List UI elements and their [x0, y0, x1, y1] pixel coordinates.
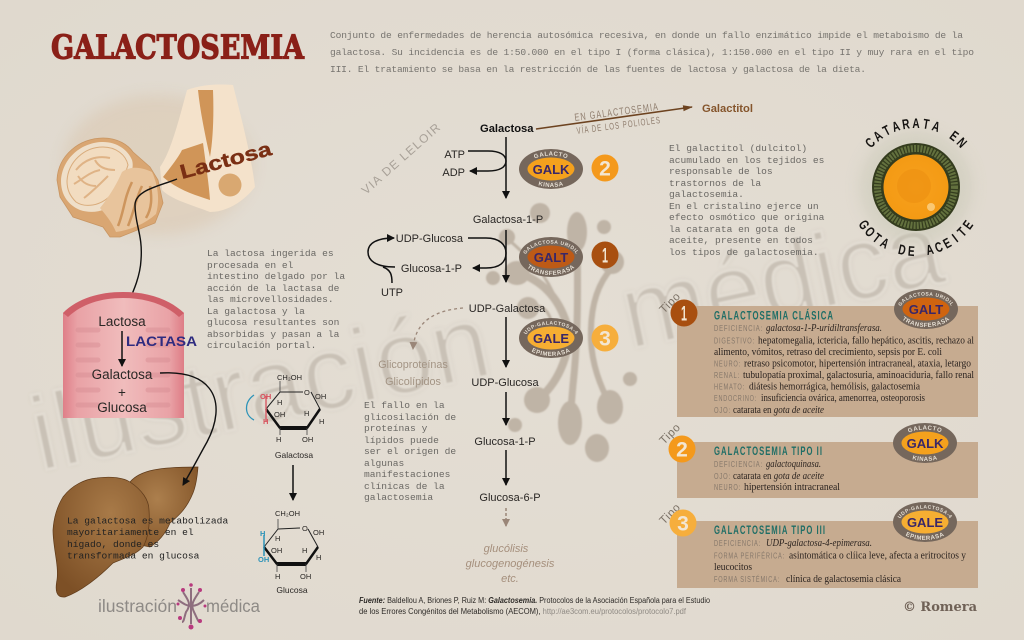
arrow: lactosa to galactosa — [121, 331, 123, 366]
badge: GALT panel: GALACTOSA URIDIL — [898, 292, 953, 306]
text: lactosa: procesada en el — [207, 260, 294, 271]
panel: galactosemia clásica: ENDOCRINO: — [714, 393, 757, 403]
panel: galactosemia clásica: tubulopatía proximal, galactosuria, aminoaciduria, fallo renal — [743, 370, 974, 381]
badge: GALT — [519, 237, 583, 277]
arrow: galactosa to liver — [160, 373, 216, 485]
intro text: Conjunto de enfermedades de herencia autosómica recesiva, en donde un fallo enzimático impide el metaboismo de la — [330, 30, 963, 41]
panel: galactosemia clásica: diátesis hemorrágica, hemólisis, galactosemia — [749, 382, 920, 392]
badge: GALK — [519, 149, 583, 189]
panel: galactosemia tipo II: OJO: — [714, 471, 731, 481]
label: catarata en gota de aceite: E — [947, 128, 962, 145]
arrow: a glicoproteínas — [413, 308, 463, 349]
watermark: ilustración médica: médica — [610, 189, 953, 371]
text: galactitol: El galactitol (dulcitol) — [669, 143, 807, 154]
diagram: glucosa ring: O — [302, 524, 308, 533]
pathway: metabolitos — [381, 123, 546, 504]
badge: GALE panel: UDP-GALACTOSA-4 — [898, 505, 952, 518]
label: catarata en gota de aceite: E — [907, 243, 915, 259]
arrow: breast to intestine — [124, 179, 177, 313]
brain folds — [74, 157, 115, 198]
watermark: ilustración médica: ilustración — [20, 282, 500, 493]
diagram: glucosa ring: H — [275, 572, 280, 581]
pathway: metabolitos: Glucosa-1-P — [474, 436, 536, 448]
diagram: glucosa ring: CH₂OH — [275, 509, 300, 518]
label: catarata en gota de aceite: T — [954, 224, 970, 240]
panel: galactosemia tipo III: UDP-galactosa-4-epimerasa. — [766, 538, 872, 549]
badge: GALK panel — [893, 423, 957, 463]
badge: GALT panel: TRANSFERASA — [903, 316, 950, 327]
panel: galactosemia tipo II: galactoquinasa. — [766, 459, 821, 470]
label: LACTASA: LACTASA — [126, 333, 197, 349]
text: glicosilación: manifestaciones — [364, 469, 450, 480]
label: productos finales: etc. — [501, 573, 519, 585]
label: catarata en gota de aceite: C — [862, 135, 879, 151]
diagram: galactosa ring: Galactosa — [275, 450, 313, 460]
diagram: glucosa ring: Glucosa — [276, 585, 308, 595]
label: catarata en gota de aceite: A — [890, 118, 902, 135]
label: galactitol: Galactitol — [702, 103, 753, 115]
diagram: galactosa ring: H — [319, 417, 324, 426]
text: galactitol: En el cristalino ejerce un — [669, 201, 819, 212]
text: hígado — [67, 516, 228, 562]
watermark: ilustración médica: médica — [610, 189, 953, 371]
panel: galactosemia tipo II: catarata en gota de aceite — [733, 471, 824, 482]
number: 1: 1 — [602, 244, 608, 268]
intro text: III. El tratamiento se basa en la restricción de las fuentes de lactosa y galactosa de la dieta. — [330, 64, 866, 75]
text: lactosa — [207, 248, 345, 351]
diagram: galactosa ring: OH — [260, 392, 271, 401]
source: Fuente: Baldellou A, Briones P, Ruiz M: Galactosemia. Protocolos de la Asociación Española para el Estudio — [359, 596, 710, 605]
text: lactosa: La galactosa y la — [207, 306, 305, 317]
text: hígado: transformada en glucosa — [67, 550, 200, 562]
text: lactosa: glucosa resultantes son — [207, 317, 339, 328]
label: productos finales: glucogenogénesis — [466, 558, 555, 570]
panel: galactosemia clásica: DEFICIENCIA: — [714, 323, 763, 333]
panel: galactosemia clásica: NEURO: — [714, 358, 741, 368]
pathway: flechas — [368, 137, 506, 485]
badge: GALE — [519, 318, 583, 358]
panel: galactosemia tipo III: leucocitos — [714, 562, 752, 573]
pathway: metabolitos: UTP — [381, 287, 403, 299]
text: lactosa: absorbidas y pasan a la — [207, 329, 340, 340]
diagram: glucosa ring: OH — [271, 546, 282, 555]
label: catarata en gota de aceite: A — [930, 118, 942, 135]
panel: galactosemia tipo III: FORMA SISTÉMICA: — [714, 574, 780, 584]
panel: galactosemia tipo II: hipertensión intracraneal — [744, 482, 840, 493]
intestine labels — [92, 314, 153, 415]
label: catarata en gota de aceite: T — [880, 122, 893, 139]
label: catarata en gota de aceite: A — [878, 234, 892, 252]
number: 2 — [592, 154, 618, 182]
panel: galactosemia clásica — [677, 306, 978, 417]
pathway: metabolitos: Glucosa-1-P — [401, 263, 462, 275]
text: glicosilación: algunas — [364, 458, 404, 469]
panel: galactosemia tipo II: GALACTOSEMIA TIPO II — [714, 444, 823, 458]
label: vía de Leloir: VIA DE LELOIR — [359, 120, 444, 197]
text: glicosilación: galactosemia — [364, 492, 433, 503]
diagram: glucosa ring: H — [260, 529, 265, 538]
credit: © Romera — [903, 600, 978, 615]
label: catarata en gota de aceite: I — [949, 231, 961, 245]
diagram: galactosa ring: H — [277, 398, 282, 407]
text: glicosilación: proteínas y — [364, 423, 428, 434]
badge: GALE: UDP-GALACTOSA-4 — [524, 321, 578, 334]
tipo 2 marker — [658, 421, 696, 462]
skull interior — [61, 142, 133, 212]
label: catarata en gota de aceite: O — [861, 224, 878, 240]
text: hígado: La galactosa es metabolizada — [67, 516, 228, 526]
diagram: glucosa ring: OH — [258, 555, 269, 564]
illustration: head and breast — [57, 85, 255, 237]
badge: GALK panel: GALACTO — [908, 425, 942, 432]
tipo 1 marker: 1 — [681, 302, 687, 326]
breast — [160, 85, 255, 212]
panel: galactosemia tipo III: asintomática o clíica leve, afecta a eritrocitos y — [789, 550, 967, 562]
text: glicosilación: ser el origen de — [364, 446, 456, 457]
intestine labels: Glucosa — [97, 400, 147, 415]
panel: galactosemia clásica: retraso psicomotor, hipertensión intracraneal, ataxia, letargo — [744, 358, 971, 370]
pathway: metabolitos: ATP — [444, 149, 465, 161]
diagram: galactosa ring: OH — [315, 392, 326, 401]
liver — [53, 467, 198, 597]
badge: GALT: TRANSFERASA — [528, 264, 574, 275]
diagram: galactosa ring: O — [304, 388, 310, 397]
brain — [67, 147, 128, 205]
tipo 2 marker: 2 — [676, 438, 688, 462]
label: catarata en gota de aceite: T — [870, 230, 885, 247]
badge: GALE panel: EPIMERASA — [906, 532, 944, 540]
watermark: ilustración médica — [20, 189, 953, 493]
text: hígado: mayoritariamente en el — [67, 527, 194, 538]
pathway: metabolitos: UDP-Glucosa — [471, 377, 539, 389]
panel: galactosemia clásica: HEMATO: — [714, 382, 745, 392]
text: lactosa: acción de la lactasa de — [207, 283, 340, 294]
text: galactitol: responsable de los — [669, 166, 773, 177]
text: glicosilación: El fallo en la — [364, 400, 445, 411]
text: lactosa: circulación portal. — [207, 340, 316, 351]
badge: GALE: GALE — [533, 331, 569, 346]
pathway: metabolitos: ADP — [442, 167, 465, 179]
intestine labels: Galactosa — [92, 367, 153, 382]
diagram: galactosa ring: OH — [274, 410, 285, 419]
neck structures — [118, 182, 151, 226]
text: galactitol: aceite, presente en todos — [669, 235, 813, 246]
panel: galactosemia tipo III: DEFICIENCIA: — [714, 538, 761, 548]
logo: ilustración médica — [98, 583, 260, 630]
logo: ilustración médica: médica — [206, 596, 260, 616]
badge: GALT panel: GALT — [909, 302, 943, 317]
panel: galactosemia clásica: GALACTOSEMIA CLÁSICA — [714, 308, 834, 322]
pathway: metabolitos: Galactosa — [480, 123, 534, 135]
badge: GALE panel — [893, 502, 957, 542]
title: GALACTOSEMIA — [51, 28, 304, 66]
label: catarata en gota de aceite: E — [940, 235, 954, 252]
badge: GALT: GALT — [534, 250, 568, 265]
breast areola — [218, 174, 242, 196]
pathway: metabolitos: Galactosa-1-P — [473, 214, 543, 226]
panel: galactosemia clásica: galactosa-1-P-uridiltransferasa. — [766, 323, 882, 334]
badge: GALK panel: KINASA — [912, 455, 938, 461]
number: 1 — [592, 242, 618, 268]
label: catarata en gota de aceite: G — [855, 217, 873, 233]
label: catarata en gota de aceite: E — [960, 217, 977, 232]
tipo 3 marker: 3 — [677, 512, 689, 536]
source: de los Errores Congénitos del Metabolismo (AECOM), http://ae3com.eu/protocolos/protocolo7.pdf — [359, 607, 687, 616]
pathway: metabolitos: Glucosa-6-P — [479, 492, 541, 504]
diagram: galactosa ring — [246, 373, 326, 460]
text: galactitol: trastornos de la — [669, 178, 761, 189]
badge: GALK: KINASA — [538, 181, 564, 187]
badge: GALK: GALACTO — [534, 151, 568, 158]
panel: galactosemia tipo II: NEURO: — [714, 482, 741, 492]
number: 3: 3 — [599, 328, 611, 350]
badge: GALT: GALACTOSA URIDIL — [524, 240, 578, 254]
label: catarata en gota de aceite: R — [901, 116, 911, 133]
panel: galactosemia clásica: OJO: — [714, 405, 731, 415]
label: catarata en gota de aceite: D — [897, 241, 908, 259]
source — [359, 596, 710, 616]
pathway: metabolitos: UDP-Galactosa — [469, 303, 546, 315]
diagram: glucosa ring — [258, 509, 324, 595]
panel: galactosemia clásica: DIGESTIVO: — [714, 336, 755, 346]
diagram: glucosa ring: H — [302, 546, 307, 555]
diagram: glucosa ring: OH — [300, 572, 311, 581]
badge: GALE panel: GALE — [907, 515, 943, 530]
tipo 3 marker: Tipo — [658, 501, 683, 527]
text: glicosilación: glicosilación de — [364, 412, 456, 423]
label: glicoproteínas y glicolípidos: Glicoproteínas — [378, 359, 448, 371]
label: catarata en gota de aceite: A — [925, 241, 935, 259]
eye: catarata — [860, 131, 972, 243]
panel: galactosemia tipo III: clínica de galactosemia clásica — [786, 574, 901, 585]
text: lactosa: intestino delgado por la — [207, 271, 345, 282]
panel: galactosemia tipo II — [677, 442, 978, 498]
text: galactitol: efecto osmótico que origina — [669, 212, 825, 223]
arrow: a glucólisis — [505, 508, 507, 526]
text: galactitol: la catarata en gota de — [669, 224, 796, 235]
logo: ilustración médica: ilustración — [98, 596, 177, 616]
diagram: galactosa ring: H — [304, 409, 309, 418]
face and neck — [100, 168, 158, 232]
text: lactosa: La lactosa ingerida es — [207, 248, 334, 259]
panel: galactosemia clásica: hepatomegalia, ictericia, fallo hepático, ascitis, rechazo al — [758, 336, 974, 346]
text: glicosilación: clínicas de la — [364, 481, 445, 492]
label: glicoproteínas y glicolípidos: Glicolípidos — [385, 376, 442, 388]
text: glicosilación — [364, 400, 456, 503]
number: 2: 2 — [599, 158, 611, 180]
panel: galactosemia clásica: insuficiencia ovárica, amenorrea, osteoporosis — [761, 393, 925, 404]
diagram: galactosa ring: OH — [302, 435, 313, 444]
text: galactitol: galactosemia. — [669, 189, 744, 200]
text: galactitol: acumulado en los tejidos es — [669, 155, 824, 166]
label: catarata en gota de aceite: T — [922, 116, 931, 133]
panel: galactosemia tipo II: DEFICIENCIA: — [714, 459, 763, 469]
intestine — [63, 292, 184, 418]
number: 3 — [592, 324, 618, 352]
label: vía de los polioles: VÍA DE LOS POLIOLES — [576, 115, 662, 137]
panel: galactosemia clásica: alimento, vómitos, retraso del crecimiento, sepsis por E. coli — [714, 347, 942, 358]
text: galactitol: los tipos de galactosemia. — [669, 247, 819, 258]
label: Lactosa: Lactosa — [178, 138, 275, 184]
label: catarata en gota de aceite: C — [933, 238, 945, 256]
text: galactitol — [669, 143, 825, 258]
badge: GALT panel — [894, 289, 958, 329]
head — [57, 138, 163, 237]
label: catarata en gota de aceite — [855, 115, 977, 259]
text: lactosa: las microvellosidades. — [207, 294, 334, 305]
tipo 3 marker — [658, 501, 696, 536]
diagram: galactosa ring: H — [276, 435, 281, 444]
panel: galactosemia clásica: RENAL: — [714, 370, 740, 380]
text: hígado: hígado, donde es — [67, 539, 159, 550]
arrow: vía de los polioles — [536, 107, 692, 129]
diagram: galactosa ring: CH₂OH — [277, 373, 302, 382]
label: productos finales — [466, 543, 555, 585]
intestine labels: Lactosa — [98, 314, 146, 329]
panel: galactosemia tipo III: FORMA PERIFÉRICA: — [714, 550, 785, 560]
intestine labels: + — [118, 385, 126, 400]
label: catarata en gota de aceite: A — [870, 127, 886, 145]
diagram: glucosa ring: OH — [313, 528, 324, 537]
intro text: galactosa. Su incidencia es de 1:50.000 en el tipo I (forma clásica), 1:150.000 en el tipo II y muy rara en el tipo — [330, 47, 974, 58]
label: en galactosemia: EN GALACTOSEMIA — [574, 101, 660, 124]
label: glicoproteínas y glicolípidos — [378, 359, 448, 388]
tipo 2 marker: Tipo — [658, 421, 683, 447]
breast ducts — [163, 90, 213, 200]
diagram: glucosa ring: H — [275, 534, 280, 543]
diagram: galactosa ring: H — [263, 417, 268, 426]
badge: GALK panel: GALK — [907, 436, 944, 451]
panel: galactosemia tipo III — [677, 521, 978, 588]
pathway: metabolitos: UDP-Glucosa — [396, 233, 464, 245]
arrow: galactosa to glucosa — [292, 465, 294, 500]
text: glicosilación: lípidos puede — [364, 435, 439, 446]
panel: galactosemia tipo III: GALACTOSEMIA TIPO III — [714, 523, 826, 537]
badge: GALE: EPIMERASA — [532, 348, 570, 356]
panel: galactosemia clásica: catarata en gota de aceite — [733, 405, 824, 416]
badge: GALK: GALK — [533, 162, 570, 177]
watermark: ilustración médica: ilustración — [20, 282, 500, 493]
diagram: glucosa ring: H — [316, 553, 321, 562]
tipo 1 marker: Tipo — [658, 290, 683, 316]
tipo 1 marker — [658, 290, 698, 326]
label: productos finales: glucólisis — [484, 543, 529, 555]
label: catarata en gota de aceite: N — [953, 135, 970, 151]
label: catarata en gota de aceite: A — [912, 115, 920, 131]
intro text — [330, 30, 974, 75]
